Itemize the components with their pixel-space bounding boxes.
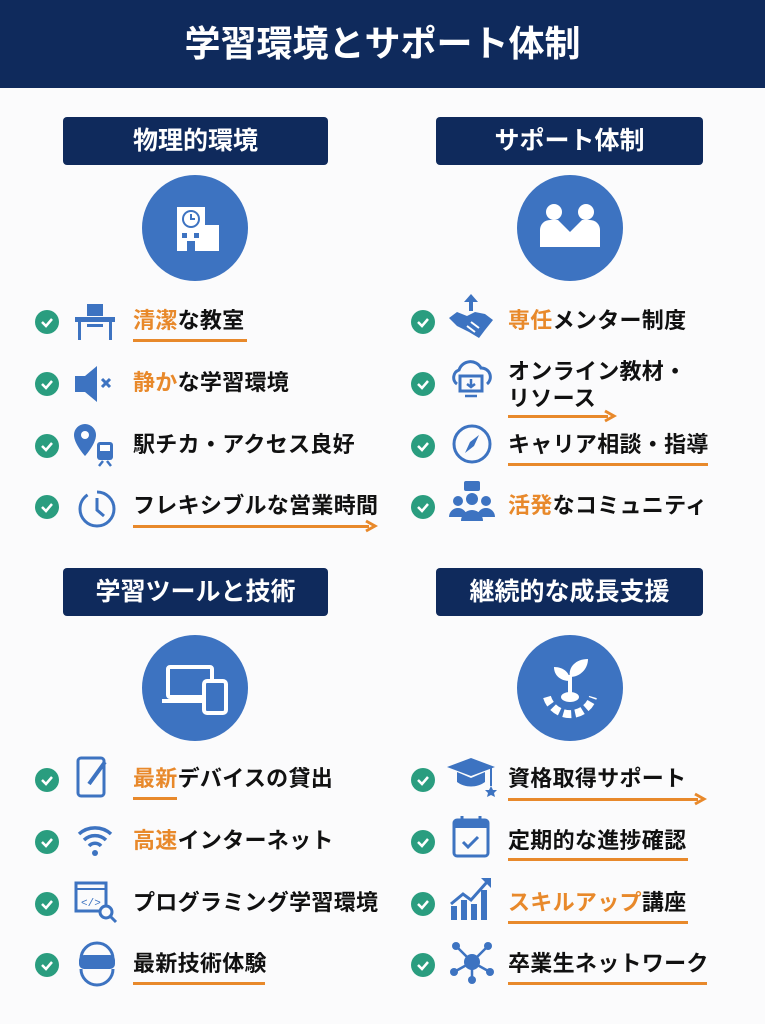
title	[0, 0, 765, 88]
item: community: 活発なコミュニティ	[508, 493, 707, 518]
item: clean classroom	[35, 304, 247, 342]
icon: plant gear	[517, 635, 623, 741]
heading: tools	[63, 568, 328, 616]
item: community	[411, 481, 707, 521]
item: online resources: リソース	[508, 386, 596, 411]
item: skill up	[411, 878, 688, 924]
item: internet	[35, 826, 334, 856]
panel: learning tools	[35, 568, 378, 986]
panel: support system	[411, 117, 709, 521]
item: quiet: 静かな学習環境	[133, 370, 289, 395]
item: programming: プログラミング学習環境	[133, 890, 378, 915]
icon: laptop tablet	[142, 635, 248, 741]
heading: growth	[436, 568, 703, 616]
item: mentor	[411, 294, 686, 338]
item: programming: </>	[81, 898, 101, 910]
panel: physical environment	[35, 117, 378, 532]
item: career: キャリア相談・指導	[508, 432, 709, 457]
item: flexible hours: フレキシブルな営業時間	[133, 493, 378, 518]
heading: tools: 学習ツールと技術	[95, 578, 296, 606]
item: progress check	[411, 816, 688, 861]
item: clean classroom: 清潔な教室	[133, 308, 245, 333]
item: device lending: 最新デバイスの貸出	[133, 766, 333, 791]
item: alumni network: 卒業生ネットワーク	[508, 951, 709, 976]
panel: continuous growth	[411, 568, 709, 985]
item: certification	[411, 758, 707, 806]
heading: physical	[63, 117, 328, 165]
item: alumni network	[411, 942, 709, 985]
item: tech experience: 最新技術体験	[133, 951, 267, 976]
icon: building	[142, 175, 248, 281]
item: online resources	[411, 359, 686, 422]
item: tech experience	[35, 942, 267, 986]
title: 学習環境とサポート体制	[184, 23, 580, 64]
item: device lending	[35, 756, 333, 800]
item: progress check: 定期的な進捗確認	[508, 828, 686, 853]
item: career	[411, 424, 709, 466]
item: flexible hours	[35, 490, 378, 532]
icon: handshake people	[517, 175, 623, 281]
heading: support: サポート体制	[494, 127, 644, 155]
item: online resources: オンライン教材・	[508, 359, 686, 384]
heading: growth: 継続的な成長支援	[469, 578, 670, 606]
item: station access	[35, 424, 355, 467]
item: programming	[35, 882, 378, 923]
item: station access: 駅チカ・アクセス良好	[133, 432, 355, 457]
item: quiet	[35, 366, 289, 402]
heading: support	[436, 117, 703, 165]
item: skill up: スキルアップ講座	[508, 890, 686, 915]
item: certification: 資格取得サポート	[508, 766, 686, 791]
item: internet: 高速インターネット	[133, 828, 334, 853]
heading: physical: 物理的環境	[133, 127, 258, 155]
item: mentor: 専任メンター制度	[508, 308, 686, 333]
